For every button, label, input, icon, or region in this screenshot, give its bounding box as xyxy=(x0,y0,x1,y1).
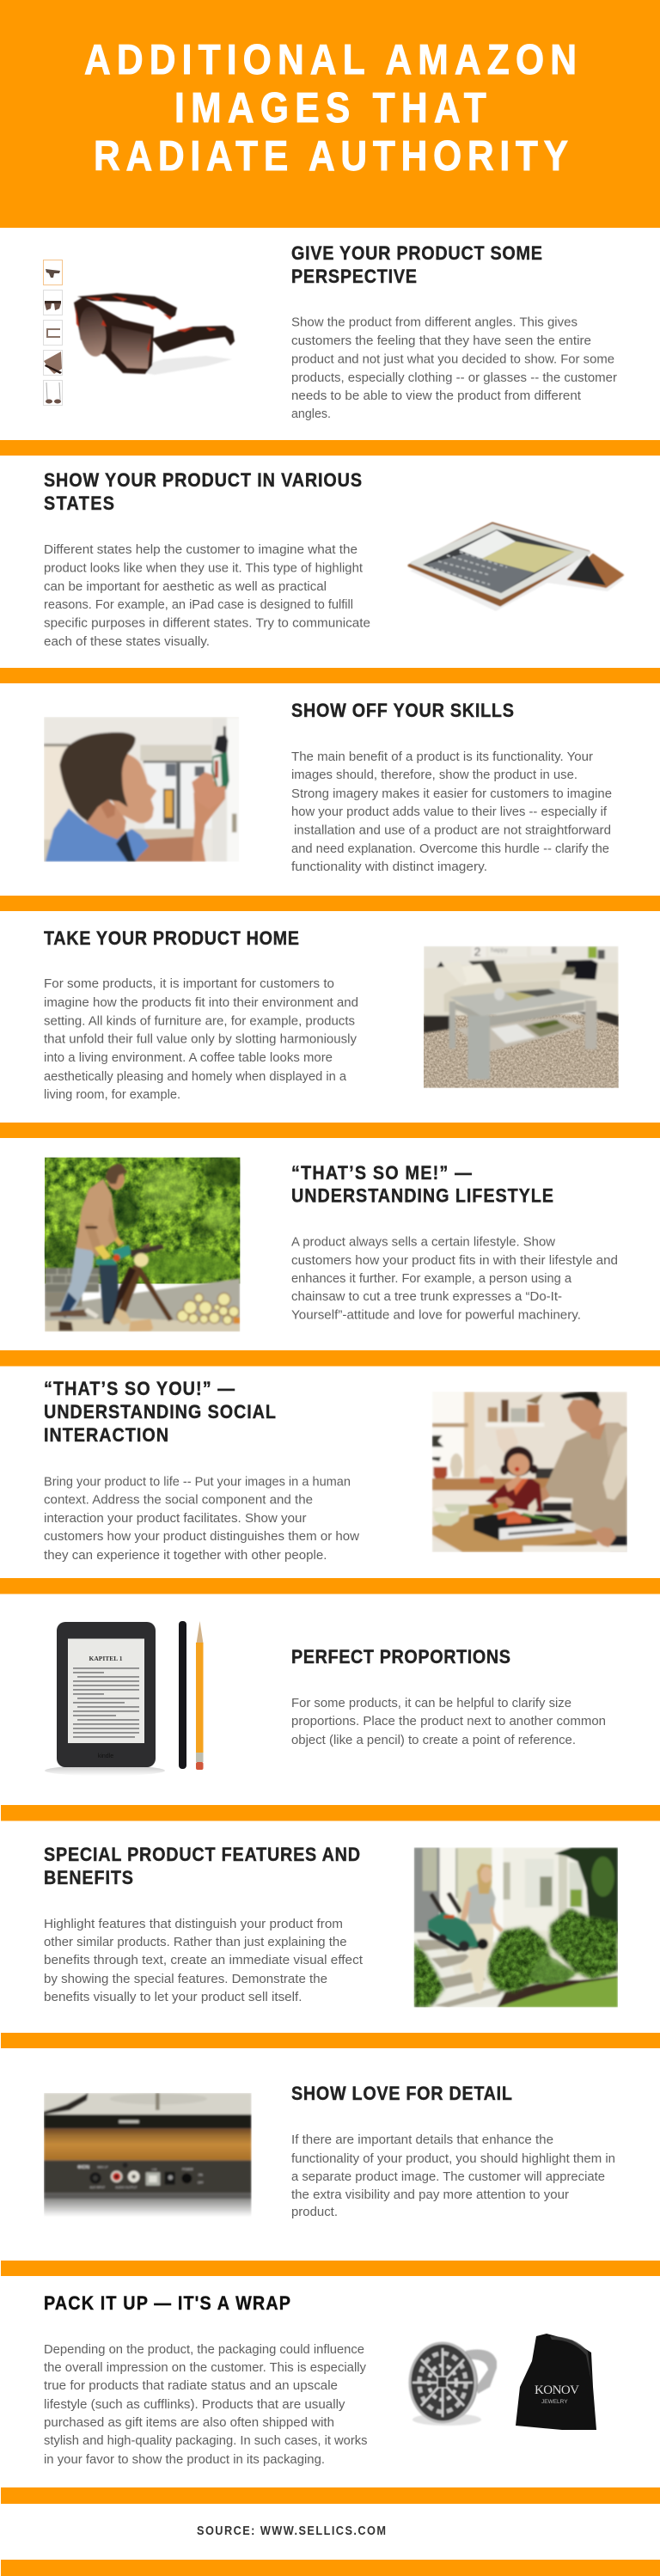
heading: UNDERSTANDING LIFESTYLE xyxy=(291,1185,553,1207)
heading: “THAT’S SO YOU!” — xyxy=(44,1379,235,1399)
thumbnails xyxy=(43,260,62,406)
body text: needs to be able to view the product from different xyxy=(291,389,581,403)
body text: For some products, it can be helpful to clarify size xyxy=(291,1697,571,1710)
header banner xyxy=(0,0,660,228)
heading: TAKE YOUR PRODUCT HOME xyxy=(44,928,299,949)
body text: product. xyxy=(291,2206,338,2219)
body text: a separate product image. The customer will appreciate xyxy=(291,2170,605,2184)
title: IMAGES THAT xyxy=(174,83,486,132)
image: turntable back panel xyxy=(44,2093,252,2217)
panel: special features xyxy=(44,1845,618,2007)
heading xyxy=(44,470,362,514)
panel: take product home xyxy=(44,928,619,1102)
heading: SHOW YOUR PRODUCT IN VARIOUS xyxy=(44,470,362,491)
body text: Strong imagery makes it easier for customers to imagine xyxy=(291,787,612,801)
body text: into a living environment. A coffee table looks more xyxy=(44,1051,333,1065)
image: kindle next to pencil xyxy=(45,1621,203,1776)
heading: PERFECT PROPORTIONS xyxy=(291,1647,510,1667)
kindle reader: kindle xyxy=(98,1753,113,1759)
pouch xyxy=(516,2334,596,2430)
image: turntable back panel: ON xyxy=(199,2174,203,2177)
body text: reasons. For example, an iPad case is designed to fulfill xyxy=(44,598,353,612)
body text: setting. All kinds of furniture are, for example, products xyxy=(44,1014,355,1028)
body text: can be important for aesthetic as well as practical xyxy=(44,580,327,594)
body text: Show the product from different angles. This gives xyxy=(291,316,578,330)
image: man with chainsaw xyxy=(43,1156,243,1331)
body text: imagine how the products fit into their environment and xyxy=(44,996,358,1010)
heading: BENEFITS xyxy=(44,1868,133,1888)
title xyxy=(84,35,577,180)
body text: Bring your product to life -- Put your images in a human xyxy=(44,1475,351,1489)
body text: Yourself”-attitude and love for powerful machinery. xyxy=(291,1308,581,1322)
kindle shadow xyxy=(45,1765,165,1776)
body text: object (like a pencil) to create a point of reference. xyxy=(291,1734,576,1747)
pouch: KONOV xyxy=(535,2383,579,2397)
kindle reader: KAPITEL 1 xyxy=(89,1655,123,1662)
heading: UNDERSTANDING SOCIAL xyxy=(44,1402,276,1423)
body text: installation and use of a product are not straightforward xyxy=(294,823,611,837)
body text: true for products that radiate status and an upscale xyxy=(44,2379,338,2393)
panel: social interaction xyxy=(44,1379,627,1563)
heading xyxy=(291,243,542,287)
image: turntable back panel: ✲ION xyxy=(77,2165,89,2170)
body text: how your product adds value to their lives -- especially if xyxy=(291,805,608,819)
image: turntable back panel: POWER xyxy=(182,2168,193,2171)
body text xyxy=(291,1697,606,1747)
body text: benefits through text, create an immediate visual effect xyxy=(44,1954,363,1967)
body text: product looks like when they use it. This type of highlight xyxy=(44,562,363,576)
heading xyxy=(44,1379,276,1446)
body text: Different states help the customer to imagine what the xyxy=(44,543,358,557)
heading: SPECIAL PRODUCT FEATURES AND xyxy=(44,1845,360,1865)
panel: perfect proportions xyxy=(45,1621,606,1776)
body text: Highlight features that distinguish your product from xyxy=(44,1918,343,1931)
source credit: SOURCE: WWW.SELLICS.COM xyxy=(197,2524,386,2537)
body text xyxy=(291,2133,615,2219)
body text: interaction your product facilitates. Show your xyxy=(44,1512,307,1526)
body text: customers how your product distinguishes them or how xyxy=(44,1530,360,1544)
panel: perspective xyxy=(43,243,617,421)
body text: customers how your product fits in with their lifestyle and xyxy=(291,1254,618,1268)
body text: enhances it further. For example, a person using a xyxy=(291,1272,572,1286)
heading: SHOW LOVE FOR DETAIL xyxy=(291,2083,512,2104)
image: coffee table in living room: happy xyxy=(491,945,508,953)
body text: living room, for example. xyxy=(44,1088,180,1102)
pencil xyxy=(196,1621,203,1770)
heading: SHOW OFF YOUR SKILLS xyxy=(291,701,514,721)
image: turntable back panel: USB xyxy=(151,2168,156,2171)
heading: “THAT’S SO ME!” — xyxy=(291,1163,473,1184)
body text xyxy=(44,1918,363,2004)
panel: understanding lifestyle xyxy=(43,1156,618,1331)
body text: If there are important details that enhance the xyxy=(291,2133,553,2147)
image: father and daughter cooking xyxy=(432,1392,627,1552)
body text: customers the feeling that they have seen the entire xyxy=(291,334,591,348)
panel: various states xyxy=(44,470,623,649)
body text: they can experience it together with other people. xyxy=(44,1549,327,1563)
heading xyxy=(291,1163,553,1207)
kindle reader xyxy=(57,1622,156,1767)
body text: stylish and high-quality packaging. In such cases, it works xyxy=(44,2434,368,2448)
heading: GIVE YOUR PRODUCT SOME xyxy=(291,243,542,264)
body text xyxy=(291,750,612,874)
pouch: JEWELRY xyxy=(541,2399,568,2405)
heading: STATES xyxy=(44,493,114,514)
title: RADIATE AUTHORITY xyxy=(94,132,568,180)
body text: purchased as gift items are also often shipped with xyxy=(44,2416,334,2430)
body text: angles. xyxy=(291,407,331,421)
body text: the extra visibility and pay more attention to your xyxy=(291,2188,569,2202)
panel: show off skills xyxy=(44,701,612,874)
body text: products, especially clothing -- or glasses -- the customer xyxy=(291,371,617,385)
image: coffee table in living room: 2 xyxy=(474,945,481,958)
heading: INTERACTION xyxy=(44,1425,168,1446)
sunglasses xyxy=(74,293,235,375)
image: man using drill xyxy=(44,717,239,862)
image: turntable back panel: OFF xyxy=(198,2181,204,2184)
heading xyxy=(44,1845,360,1888)
heading: PACK IT UP — IT'S A WRAP xyxy=(44,2293,290,2314)
body text xyxy=(291,1236,618,1322)
body text: The main benefit of a product is its functionality. Your xyxy=(291,750,593,764)
body text xyxy=(44,2343,368,2467)
image: turntable back panel: MAX LP xyxy=(97,2166,108,2169)
body text: and need explanation. Overcome this hurdle -- clarify the xyxy=(291,842,609,856)
body text: lifestyle (such as cufflinks). Products that are usually xyxy=(44,2398,345,2412)
body text: that unfold their full value only by slotting harmoniously xyxy=(44,1033,358,1047)
image: cufflink and jewelry pouch xyxy=(410,2334,596,2430)
body text: images should, therefore, show the product in use. xyxy=(291,768,578,782)
body text: A product always sells a certain lifestyle. Show xyxy=(291,1236,556,1250)
body text: each of these states visually. xyxy=(44,635,210,649)
heading: PERSPECTIVE xyxy=(291,266,417,287)
body text: product and not just what you decided to show. For some xyxy=(291,352,614,366)
image: sunglasses with angle thumbnails xyxy=(43,260,235,406)
body text: specific purposes in different states. Try to communicate xyxy=(44,617,370,631)
body text: in your favor to show the product in its packaging. xyxy=(44,2453,325,2467)
image: turntable back panel: AUDIO OUTPUT xyxy=(115,2186,138,2189)
body text: functionality with distinct imagery. xyxy=(291,860,487,874)
body text: benefits visually to let your product sell itself. xyxy=(44,1991,302,2004)
body text xyxy=(44,977,358,1102)
image: coffee table in living room xyxy=(424,945,619,1088)
title: ADDITIONAL AMAZON xyxy=(84,35,577,83)
body text: Depending on the product, the packaging could influence xyxy=(44,2343,364,2357)
body text: proportions. Place the product next to another common xyxy=(291,1715,606,1729)
body text xyxy=(44,1475,360,1563)
image: woman carrying lawn mower xyxy=(414,1847,618,2007)
body text: the overall impression on the customer. This is especially xyxy=(44,2361,367,2375)
body text xyxy=(44,543,370,649)
cufflink xyxy=(410,2343,497,2426)
body text: other similar products. Rather than just explaining the xyxy=(44,1936,346,1949)
body text: chainsaw to cut a tree trunk expresses a “Do-It- xyxy=(291,1290,562,1304)
body text: functionality of your product, you should highlight them in xyxy=(291,2152,615,2166)
body text: For some products, it is important for customers to xyxy=(44,977,334,991)
image: turntable back panel: AUX INPUT xyxy=(89,2186,105,2189)
image: tablet case xyxy=(409,523,623,611)
body text xyxy=(291,316,617,421)
panel: love for detail xyxy=(44,2083,615,2219)
body text: context. Address the social component and the xyxy=(44,1494,313,1508)
shrubs with leaf texture xyxy=(414,1908,618,2007)
panel: packaging xyxy=(44,2293,596,2467)
body text: aesthetically pleasing and homely when displayed in a xyxy=(44,1070,347,1084)
kindle side view xyxy=(179,1621,186,1769)
body text: by showing the special features. Demonstrate the xyxy=(44,1973,327,1986)
